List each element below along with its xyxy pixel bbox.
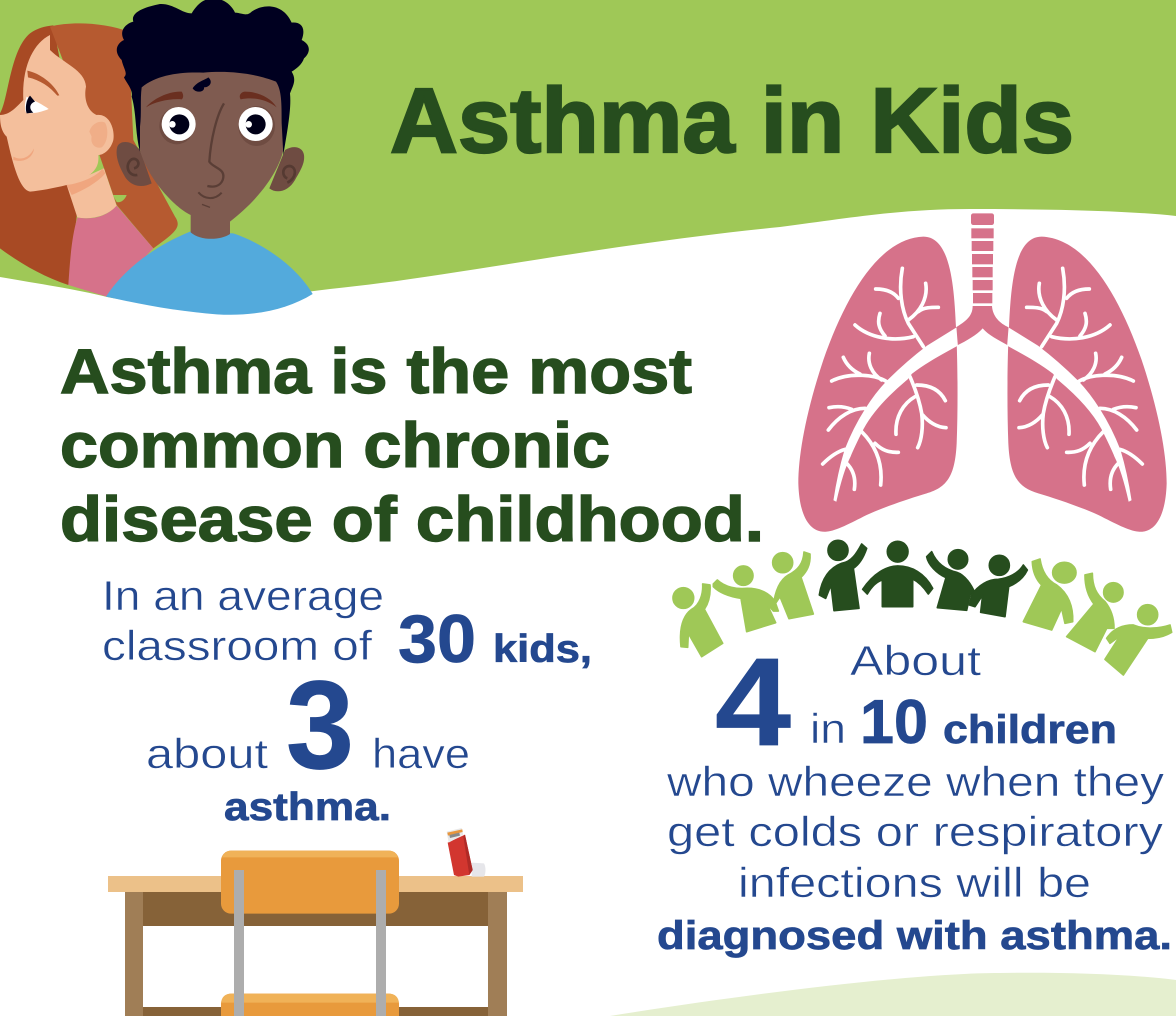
white wave body <box>0 209 1176 1016</box>
text block: wheezing statistic: children <box>943 708 1117 752</box>
illustration: school desk, chair and inhaler <box>108 828 523 1016</box>
inhaler <box>447 828 485 877</box>
heading: most common chronic disease: disease of childhood. <box>60 485 764 555</box>
right lung <box>1007 237 1167 532</box>
heading: most common chronic disease <box>60 337 764 555</box>
text block: wheezing statistic: 4 <box>715 633 791 772</box>
text block: classroom statistic: In an average <box>102 572 384 619</box>
boy <box>106 0 313 315</box>
green header background <box>0 0 1176 300</box>
text block: classroom statistic: classroom of <box>102 622 372 669</box>
text block: classroom statistic: 30 <box>398 601 476 677</box>
title: Asthma in Kids <box>390 70 1074 172</box>
girl <box>0 23 178 297</box>
text block: wheezing statistic: who wheeze when they <box>666 758 1164 805</box>
heading: most common chronic disease: common chronic <box>60 411 610 481</box>
text block: wheezing statistic: 10 <box>860 688 928 757</box>
text block: wheezing statistic: in <box>810 705 846 752</box>
text block: wheezing statistic: diagnosed with asthma. <box>657 914 1172 958</box>
text block: wheezing statistic: infections will be <box>738 859 1091 906</box>
text block: classroom statistic: about <box>146 730 268 777</box>
text block: wheezing statistic <box>657 633 1172 958</box>
illustration: two children <box>0 0 313 315</box>
heading: most common chronic disease: Asthma is the most <box>60 337 692 407</box>
trachea <box>956 213 1009 346</box>
text block: classroom statistic: asthma. <box>224 786 391 829</box>
text block: wheezing statistic: get colds or respiratory <box>667 808 1163 855</box>
text block: classroom statistic: kids, <box>493 628 592 671</box>
illustration: row of children <box>673 540 1172 675</box>
illustration: lungs <box>798 213 1167 532</box>
chair <box>221 851 399 1016</box>
left lung <box>798 237 958 532</box>
text block: classroom statistic <box>102 572 592 829</box>
text block: classroom statistic: have <box>372 730 470 777</box>
text block: classroom statistic: 3 <box>286 656 354 795</box>
pale green bottom wave <box>610 973 1176 1016</box>
text block: wheezing statistic: About <box>850 637 981 684</box>
